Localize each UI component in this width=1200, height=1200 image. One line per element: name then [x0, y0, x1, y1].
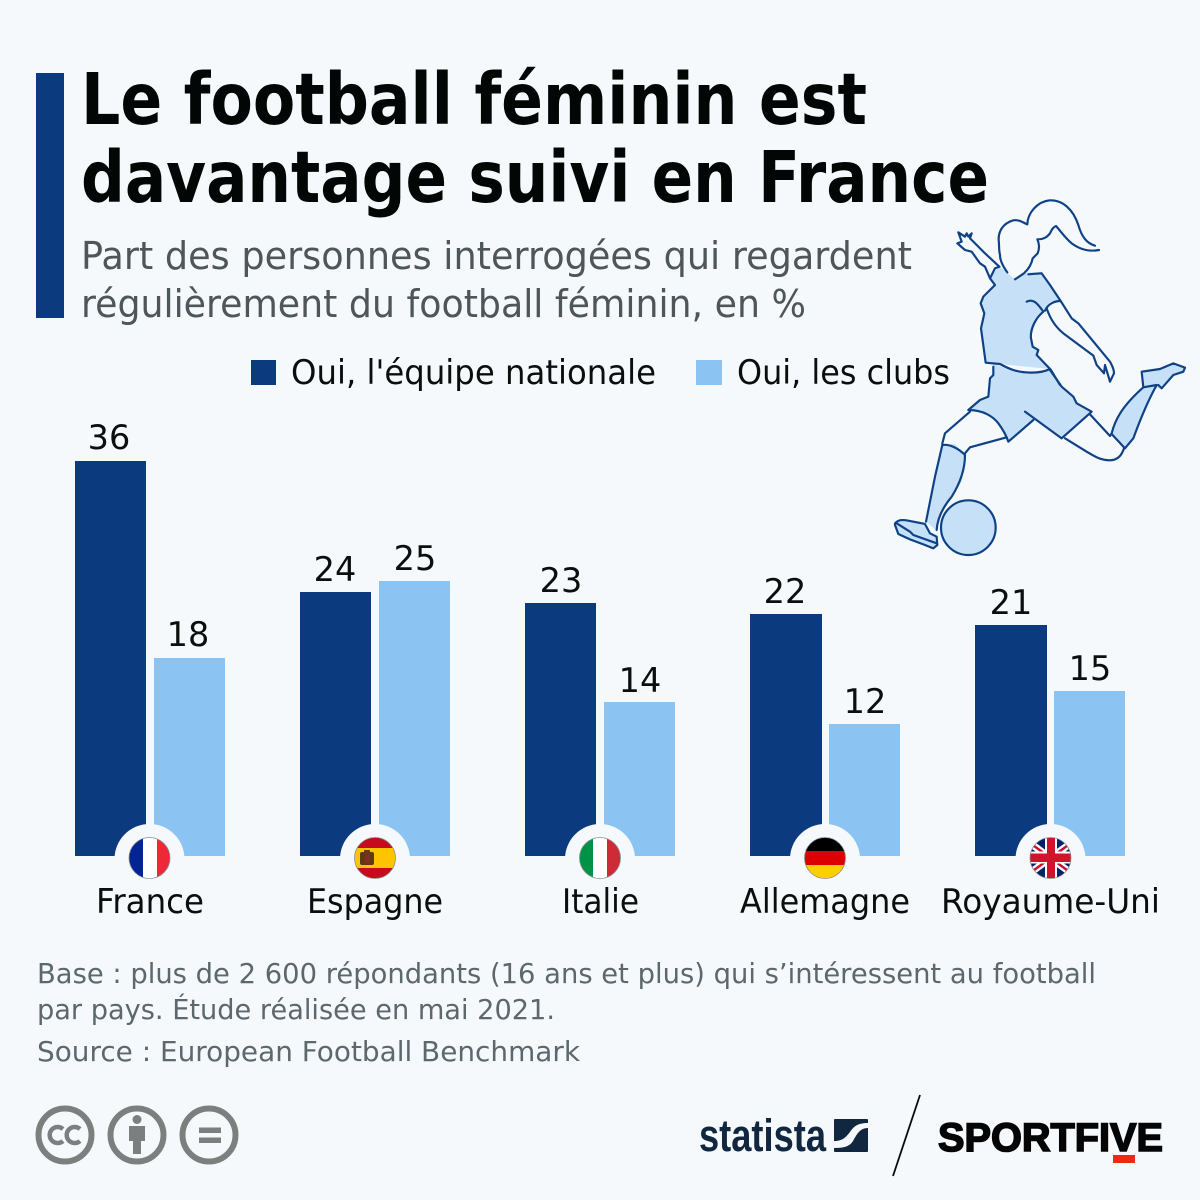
flag: Italie [579, 837, 621, 879]
country labels: Italie [562, 882, 639, 921]
group: Allemagne: 22 [764, 572, 806, 611]
bar: Royaume-Uni clubs 15 [1054, 691, 1125, 856]
group: Espagne: 24 [314, 550, 356, 589]
bar: Allemagne clubs 12 [829, 724, 900, 856]
group: Espagne: 25 [394, 539, 436, 578]
icon: attribution [110, 1108, 164, 1162]
flag badge backgrounds [114, 824, 1086, 894]
bar: Italie national 23 [525, 603, 596, 856]
divider slash [893, 1095, 920, 1176]
title accent bar [36, 73, 64, 318]
player fills [895, 266, 1185, 555]
footnote: base [37, 957, 1096, 1026]
bar: Espagne national 24 [300, 592, 371, 856]
group: Royaume-Uni: 21 [990, 583, 1032, 622]
flag: Allemagne [804, 837, 846, 879]
logo: statista: statista [699, 1110, 827, 1161]
group: Espagne [300, 539, 450, 856]
group: Royaume-Uni [975, 583, 1125, 856]
group: France: 36 [88, 418, 130, 457]
bar: Espagne clubs 25 [379, 581, 450, 856]
country labels: Espagne [307, 882, 443, 921]
title: davantage suivi en France [81, 136, 989, 219]
group: Italie [525, 561, 675, 856]
flag: Royaume-Uni [1030, 837, 1072, 879]
illustration: female football player [895, 200, 1185, 555]
country labels: Allemagne [740, 882, 910, 921]
flag: Espagne [354, 837, 396, 879]
group: Royaume-Uni: 15 [1069, 649, 1111, 688]
bar: France clubs 18 [154, 658, 225, 856]
legend item: national team: Oui, l'équipe nationale [291, 353, 656, 392]
group: France [75, 418, 225, 856]
bar: Italie clubs 14 [604, 702, 675, 856]
icon: no derivatives [182, 1108, 236, 1162]
country labels [96, 882, 1160, 921]
subtitle [81, 234, 912, 326]
title [81, 58, 989, 219]
bar chart [75, 418, 1125, 856]
footnote: source: Source : European Football Benchmark [37, 1035, 581, 1068]
bar: Allemagne national 22 [750, 614, 822, 856]
bar: Royaume-Uni national 21 [975, 625, 1047, 856]
country labels: France [96, 882, 204, 921]
legend [251, 353, 950, 392]
flag: France [129, 837, 171, 879]
group: Italie: 23 [540, 561, 582, 600]
flag outlines [129, 838, 1071, 878]
group: Allemagne: 12 [844, 682, 886, 721]
player outline [895, 200, 1185, 555]
group: France: 18 [167, 615, 209, 654]
group: Italie: 14 [619, 661, 661, 700]
footnote: base: Base : plus de 2 600 répondants (16 ans et plus) qui s’intéressent au football [37, 957, 1096, 990]
subtitle: Part des personnes interrogées qui regardent [81, 234, 912, 278]
logo: SPORTFIVE: SPORTFIVE [938, 1116, 1163, 1160]
country labels: Royaume-Uni [941, 882, 1160, 921]
subtitle: régulièrement du football féminin, en % [81, 282, 806, 326]
footnote: base: par pays. Étude réalisée en mai 2021. [37, 992, 555, 1026]
bar: France national 36 [75, 461, 146, 856]
title: Le football féminin est [81, 58, 867, 141]
group: Allemagne [750, 572, 900, 856]
icon: creative commons [38, 1108, 92, 1162]
legend item: clubs: Oui, les clubs [737, 353, 950, 392]
